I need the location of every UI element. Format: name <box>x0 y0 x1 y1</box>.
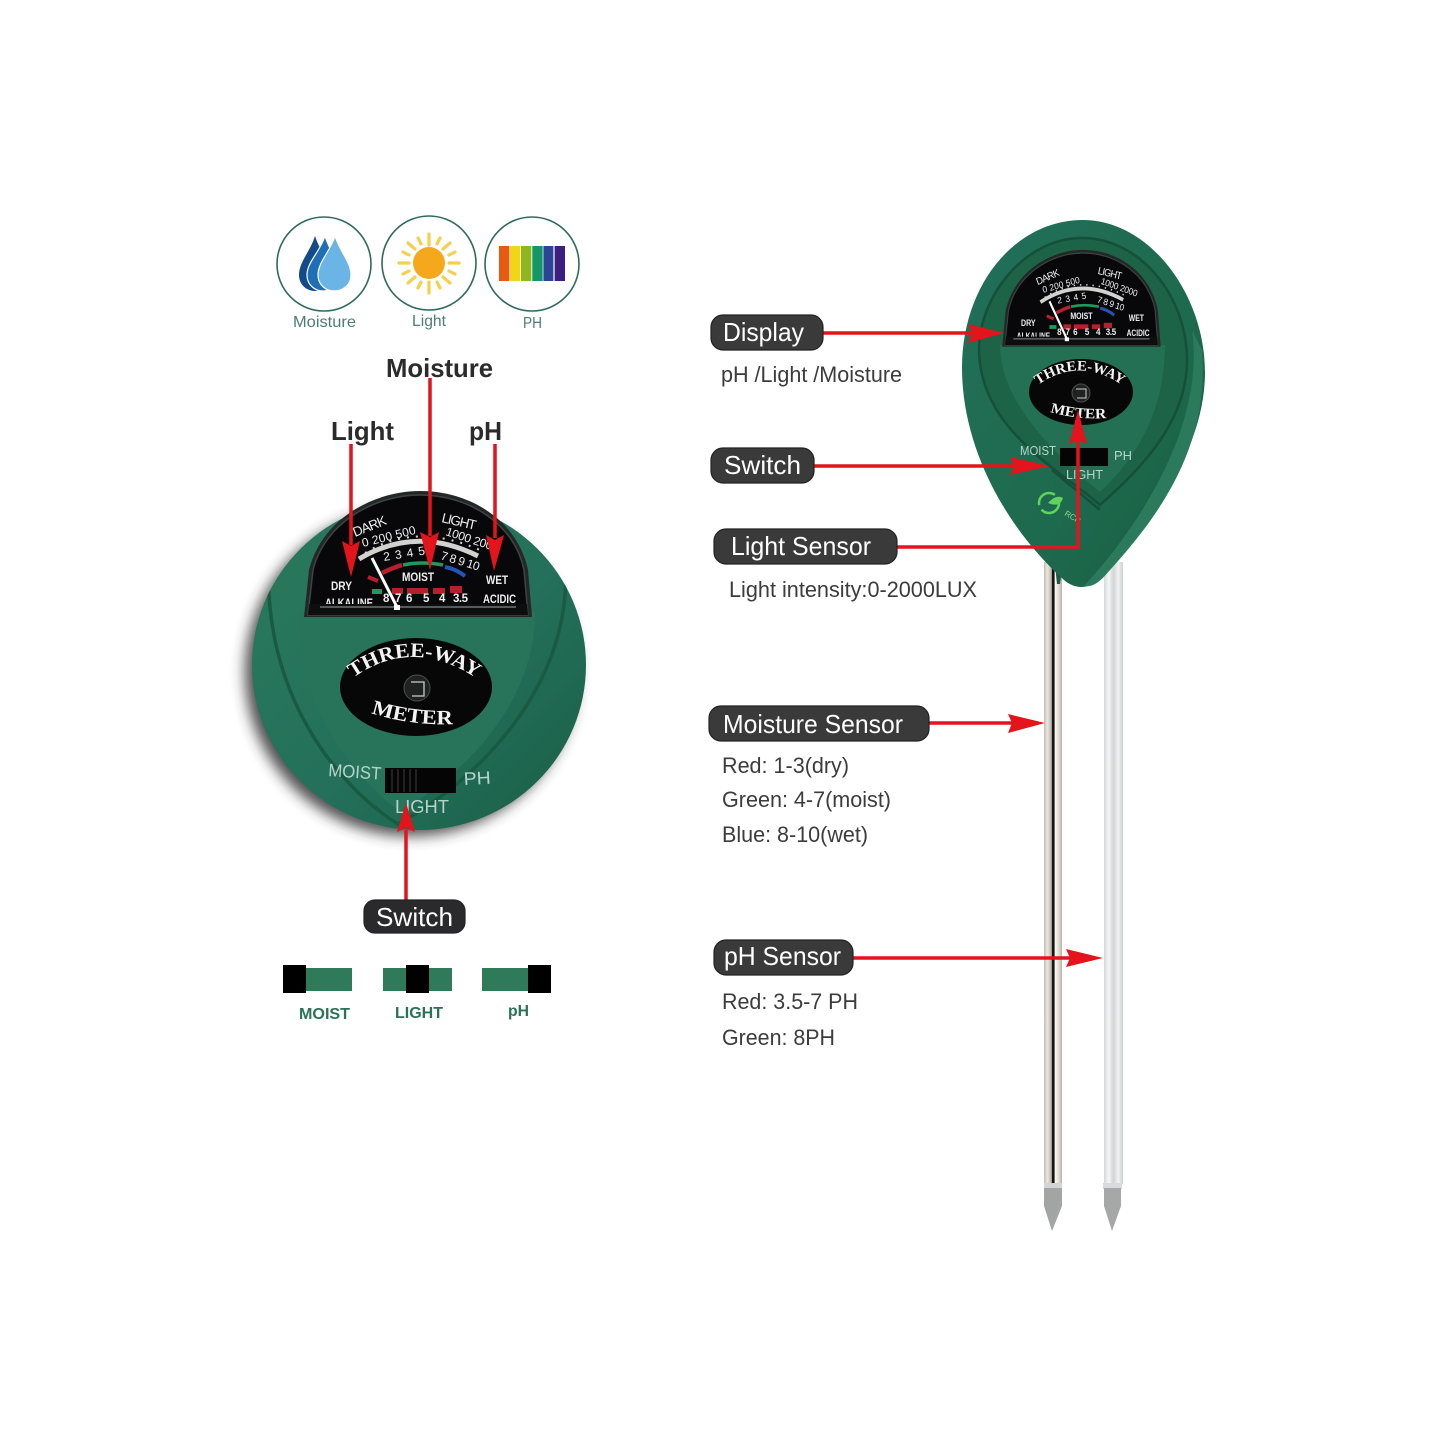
arrow: Moisture Sensor <box>929 714 1045 733</box>
text: moisture sensor details <box>722 753 891 847</box>
arrow: Switch <box>814 457 1050 475</box>
needle and scale <box>359 541 478 559</box>
small switch: PH <box>1114 448 1132 463</box>
label: Display <box>711 315 823 350</box>
teardrop body <box>962 220 1205 587</box>
display dial: 7 8 9 10 <box>439 548 482 574</box>
label: Switch <box>711 448 814 483</box>
display dial: 0 200 500 <box>360 523 417 550</box>
icon: RCP logo: RCP <box>1063 509 1082 525</box>
heading: pH: pH <box>469 416 502 446</box>
display dial: DARK <box>351 513 389 540</box>
heading: Moisture: Moisture <box>386 353 493 383</box>
small dial <box>1002 250 1161 347</box>
icon: RCP logo <box>1039 493 1082 525</box>
arrow: Switch up <box>397 803 415 900</box>
small dial: MOIST <box>1070 311 1093 321</box>
panel: full meter with probes <box>962 220 1205 1231</box>
arrow: Display <box>823 324 1004 343</box>
switch position: LIGHT <box>383 965 452 1022</box>
icon: pH colour bars: PH <box>523 315 542 332</box>
black oval label: THREE-WAY <box>346 643 482 676</box>
icon: moisture drops <box>277 217 371 331</box>
label: Switch pill <box>364 900 465 933</box>
left metal probe <box>1044 562 1062 1231</box>
label: Light Sensor <box>714 529 897 564</box>
small dial: ALKALINE <box>1017 331 1050 341</box>
meter drop shadow <box>245 508 577 836</box>
arrow: Light to dial <box>342 444 360 577</box>
arrow: Light Sensor <box>897 410 1087 547</box>
text: pH sensor details: Green: 8PH <box>722 1025 835 1050</box>
panel: round meter head close-up <box>234 491 588 848</box>
black oval label: METER <box>371 700 454 724</box>
small switch: LIGHT <box>1066 467 1103 482</box>
switch position: MOIST: MOIST <box>299 1006 350 1023</box>
icon: sun <box>382 216 476 330</box>
text: pH sensor details: Red: 3.5-7 PH <box>722 989 858 1014</box>
switch position: LIGHT: LIGHT <box>395 1005 443 1022</box>
label: Display: Display <box>723 317 804 347</box>
small black oval label <box>1029 359 1133 425</box>
small dial: 87654 <box>1057 327 1101 337</box>
small dial: LIGHT <box>1097 266 1123 283</box>
body inner panel and ridges <box>269 560 566 824</box>
text: light sensor details: Light intensity:0-2000LUX <box>729 577 977 602</box>
small dial: 7 8 9 10 <box>1096 294 1126 313</box>
mode switch: MOIST <box>328 760 382 784</box>
arrow: pH to dial <box>486 444 504 571</box>
icon: pH colour bars <box>485 217 579 332</box>
text: pH sensor details <box>722 989 858 1050</box>
label: Switch pill: Switch <box>376 902 453 932</box>
switch position: pH <box>482 965 551 1020</box>
display dial: WET <box>486 575 508 587</box>
small dial: 0 200 500 <box>1041 275 1081 295</box>
small dial: DRY <box>1021 317 1036 328</box>
mode switch: LIGHT <box>395 797 449 817</box>
right white probe <box>1103 562 1123 1231</box>
text: moisture sensor details: Red: 1-3(dry) <box>722 753 849 778</box>
display dial: LIGHT <box>440 510 478 533</box>
small dial: 3.5 <box>1106 327 1116 337</box>
display dial: 3.5 <box>453 593 469 605</box>
text: moisture sensor details: Blue: 8-10(wet) <box>722 822 868 847</box>
label: Switch: Switch <box>724 450 801 480</box>
switch position legend <box>283 965 551 1023</box>
icon: moisture drops: Moisture <box>293 314 356 331</box>
arrow: pH Sensor <box>853 949 1103 967</box>
probe collar <box>1055 565 1062 584</box>
small black oval label: THREE-WAY <box>1033 360 1126 384</box>
display dial: 1000 2000 <box>444 525 501 555</box>
small dial: 2 3 4 5 <box>1057 290 1087 306</box>
display dial: ACIDIC <box>483 594 516 606</box>
right lobe highlight <box>1084 330 1203 586</box>
meter body <box>252 500 586 830</box>
small dial: DARK <box>1035 267 1062 288</box>
small dial: 1000 2000 <box>1100 276 1139 299</box>
display dial: DRY <box>331 581 352 593</box>
arrow: Moisture to dial <box>420 378 439 570</box>
text: moisture sensor details: Green: 4-7(moist) <box>722 787 891 812</box>
icon: sun: Light <box>412 313 447 330</box>
label: Light Sensor: Light Sensor <box>731 531 871 561</box>
black oval label <box>340 638 492 736</box>
small switch: MOIST <box>1020 443 1056 458</box>
display dial: ALKALINE <box>325 598 373 610</box>
label: Moisture Sensor: Moisture Sensor <box>723 709 903 739</box>
icon group: moisture, light, pH <box>277 216 579 332</box>
mode switch <box>328 760 491 817</box>
display dial: 2 3 4 5 <box>382 544 426 564</box>
display dial: MOIST <box>402 572 434 584</box>
switch position: pH: pH <box>508 1003 529 1020</box>
small dial: WET <box>1129 313 1145 323</box>
mode switch: PH <box>463 768 491 789</box>
small black oval label: METER <box>1050 403 1106 418</box>
switch position: MOIST <box>283 965 352 1023</box>
small switch <box>1020 443 1132 482</box>
small dial: ACIDIC <box>1127 327 1150 338</box>
label: pH Sensor: pH Sensor <box>724 941 841 971</box>
display dial <box>304 491 532 617</box>
display dial: 87654 <box>383 593 446 605</box>
text: display details: pH /Light /Moisture <box>721 362 902 387</box>
heading: Light: Light <box>331 416 394 446</box>
inner ridge <box>979 238 1187 505</box>
